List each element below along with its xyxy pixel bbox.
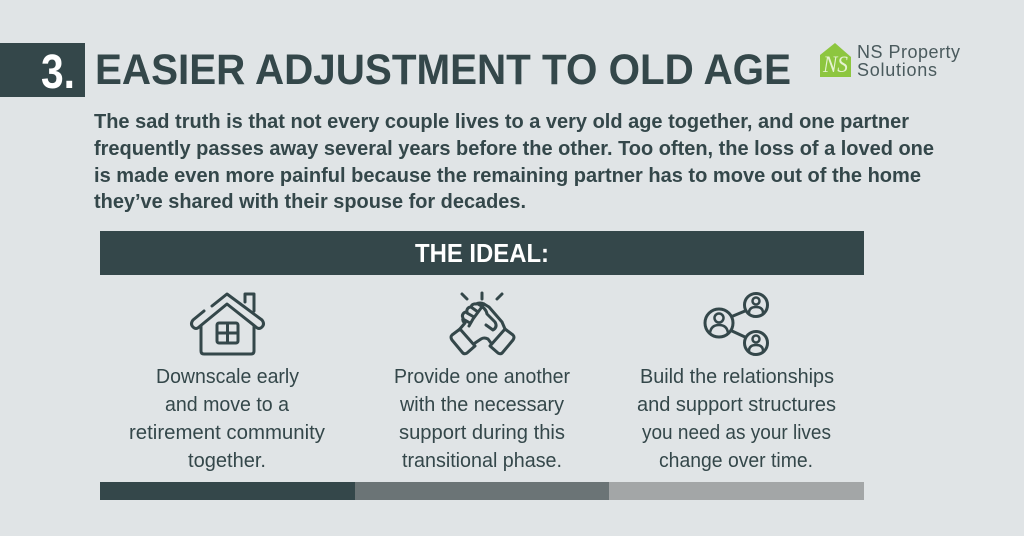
title: EASIER ADJUSTMENT TO OLD AGE: [95, 46, 791, 94]
logo: NS: [822, 52, 848, 77]
intro paragraph: [94, 111, 934, 213]
intro paragraph: The sad truth is that not every couple lives to a very old age together, and one partner: [94, 111, 909, 133]
footer tricolour bar: [100, 482, 864, 500]
logo: NS Property: [857, 42, 960, 62]
text: column one: together.: [188, 450, 266, 472]
text: column two: transitional phase.: [402, 450, 562, 472]
text: column one: and move to a: [165, 394, 290, 416]
logo: Solutions: [857, 60, 937, 80]
text: column three: you need as your lives: [642, 422, 831, 444]
logo: [820, 42, 960, 80]
heading band: the ideal: THE IDEAL:: [415, 238, 549, 268]
intro paragraph: is made even more painful because the remaining partner has to move out of the home: [94, 165, 921, 187]
number badge: 3.: [41, 46, 75, 99]
text: column three: Build the relationships: [640, 366, 834, 388]
text: column three: [637, 366, 836, 472]
text: column three: change over time.: [659, 450, 813, 472]
text: column one: Downscale early: [156, 366, 299, 388]
icon: connected people: [705, 294, 768, 354]
icon: clasped hands: [451, 293, 514, 354]
text: column two: Provide one another: [394, 366, 570, 388]
text: column two: [394, 366, 570, 472]
icon: house: [192, 294, 264, 354]
text: column one: retirement community: [129, 422, 325, 444]
text: column one: [129, 366, 325, 472]
intro paragraph: frequently passes away several years before the other. Too often, the loss of a loved one: [94, 138, 934, 160]
number badge: [0, 43, 85, 99]
heading band: the ideal: [100, 231, 864, 275]
intro paragraph: they’ve shared with their spouse for decades.: [94, 191, 526, 213]
text: column three: and support structures: [637, 394, 836, 416]
text: column two: with the necessary: [399, 394, 564, 416]
text: column two: support during this: [399, 422, 565, 444]
